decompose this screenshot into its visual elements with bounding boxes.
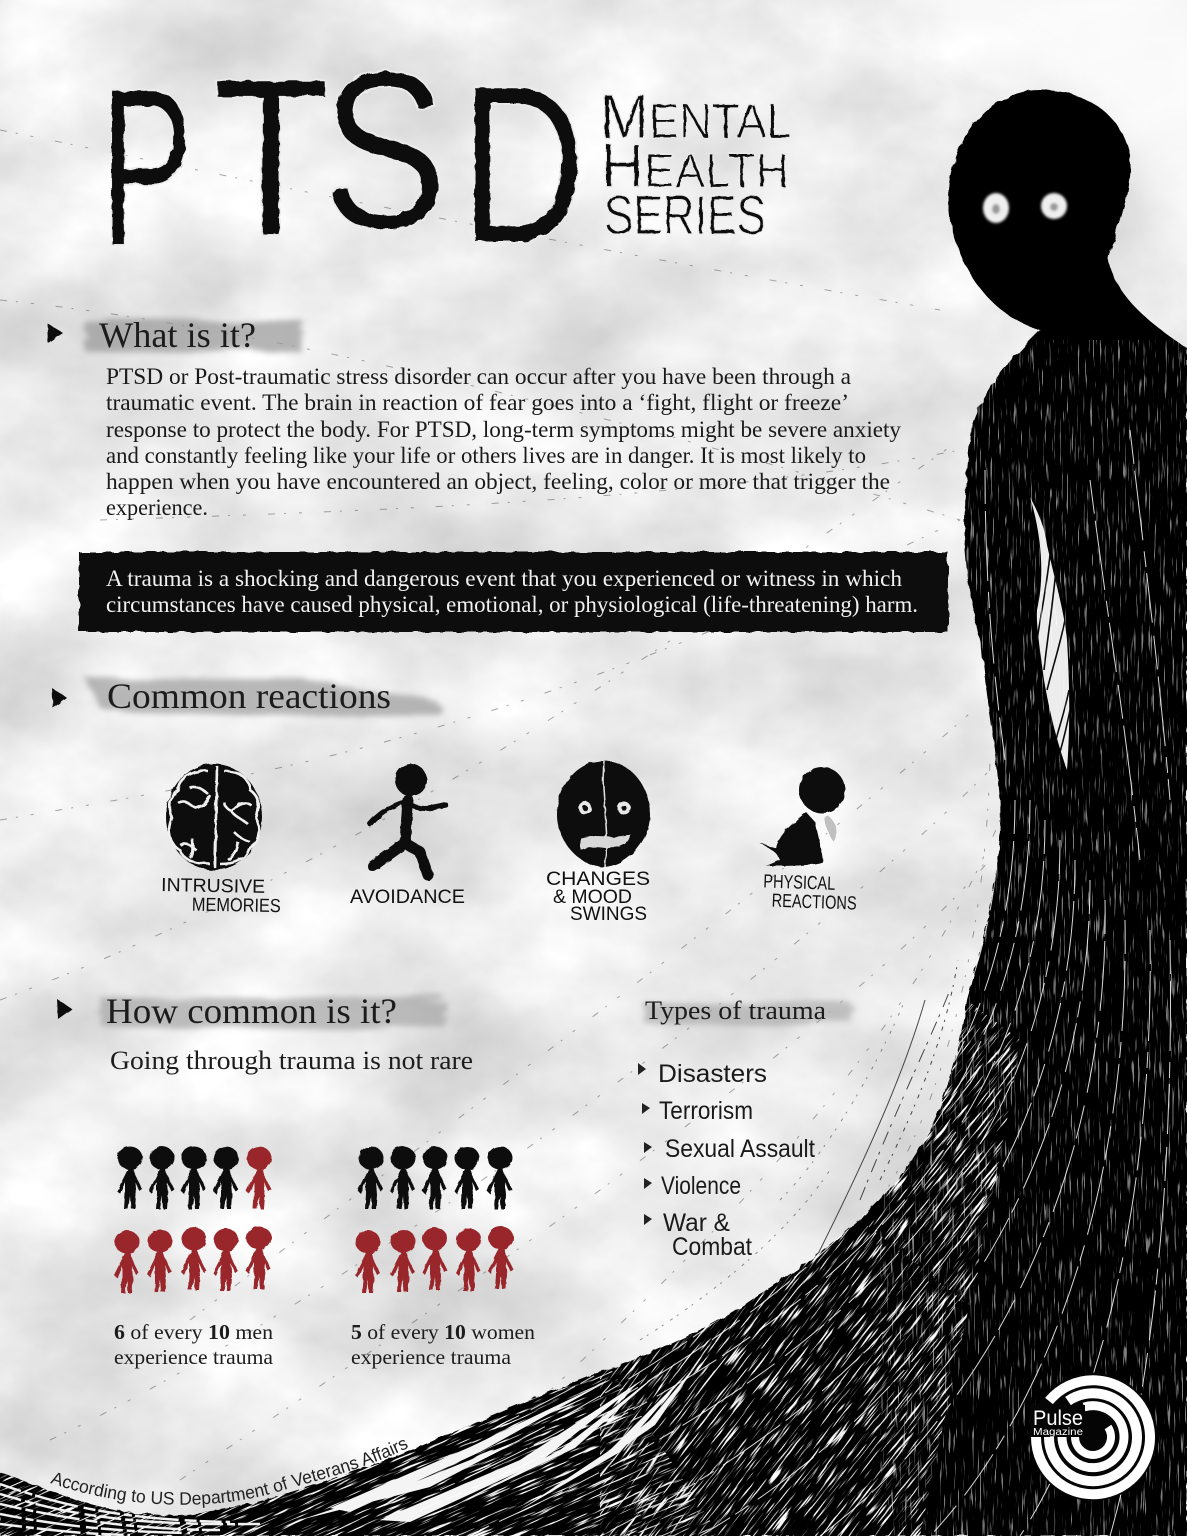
caption: women: experience trauma (351, 1345, 512, 1369)
icon: walking figure (370, 764, 446, 875)
caption: men: experience trauma (114, 1345, 274, 1369)
heading: What is it?: What is it? (99, 315, 256, 355)
subtitle: Mental Health Series: MENTAL (600, 82, 792, 152)
scratch lines (0, 130, 1000, 1480)
text block: definition (106, 364, 901, 521)
logo rings (1036, 1380, 1150, 1494)
label: avoidance: AVOIDANCE (350, 887, 465, 908)
heading: Common reactions: Common reactions (107, 676, 391, 716)
label: changes and mood swings: & MOOD (553, 887, 632, 908)
list: types of trauma: Sexual Assault (665, 1135, 815, 1163)
pictogram: women 5 of 10 (355, 1146, 514, 1293)
banner: trauma definition (79, 552, 948, 632)
label: changes and mood swings: SWINGS (570, 904, 647, 925)
bullet: How common (57, 999, 72, 1019)
caption: women: 5 of every 10 women (351, 1320, 536, 1344)
heading brush: Common reactions (85, 678, 440, 716)
caption: women (351, 1320, 536, 1369)
text block: definition: traumatic event. The brain in reaction of fear goes into a ‘fight, flight or freeze’ (106, 390, 849, 416)
icon: split face (557, 761, 650, 867)
subtitle: Mental Health Series: HEALTH (601, 132, 789, 201)
light corner wash (820, 0, 1187, 340)
label: intrusive memories: INTRUSIVE (161, 875, 265, 898)
title: PTSD (100, 24, 586, 293)
title: PTSD: D (460, 38, 586, 290)
title: PTSD: S (322, 24, 447, 276)
figure wisps (640, 960, 958, 1340)
label: intrusive memories: MEMORIES (192, 895, 281, 917)
heading: Types of trauma: Types of trauma (645, 996, 826, 1025)
caption: men (114, 1320, 274, 1369)
title: PTSD: T (212, 31, 330, 283)
eyes (983, 193, 1067, 223)
text block: definition: PTSD or Post-traumatic stress disorder can occur after you have been through a (106, 364, 852, 390)
label: physical reactions (762, 871, 858, 915)
subheading: trauma is not rare: Going through trauma is not rare (110, 1046, 473, 1075)
label: changes and mood swings: CHANGES (546, 869, 650, 890)
arm gap (1030, 497, 1070, 770)
subtitle: Mental Health Series (600, 82, 792, 246)
list: types of trauma: Disasters (658, 1060, 767, 1088)
label: physical reactions: PHYSICAL (763, 871, 836, 895)
flowing hairs (420, 430, 1170, 1536)
label: physical reactions: REACTIONS (771, 891, 857, 915)
pictogram: men 6 of 10 (114, 1146, 272, 1293)
icon: brain (166, 764, 262, 870)
banner: trauma definition: A trauma is a shocking and dangerous event that you experienced or witness in which (106, 566, 902, 592)
bullet: Common reactions (52, 688, 67, 708)
subtitle: Mental Health Series: SERIES (604, 183, 766, 246)
logo backing (1029, 1373, 1157, 1501)
text block: definition: response to protect the body. For PTSD, long-term symptoms might be severe anxiety (106, 417, 901, 443)
caption: men: 6 of every 10 men (114, 1320, 274, 1344)
title: PTSD: P (100, 41, 193, 293)
logo: Pulse Magazine (1029, 1373, 1157, 1501)
logo wordmark: Magazine (1033, 1427, 1084, 1438)
logo text backing (1030, 1405, 1085, 1436)
white strands lower left (300, 1360, 700, 1522)
bullet: What is it (47, 323, 63, 343)
heading brush: What is it (85, 320, 302, 352)
heading brush: How common (100, 998, 445, 1028)
list: types of trauma: Combat (672, 1233, 752, 1261)
heading: How common is it?: How common is it? (106, 991, 397, 1031)
fur streaks (0, 340, 1187, 1536)
source note: According to US Department of Veterans Affairs (50, 1440, 408, 1508)
logo wordmark: Pulse (1033, 1407, 1083, 1430)
banner: trauma definition: circumstances have caused physical, emotional, or physiological (life-threatening) harm. (106, 592, 918, 618)
text block: definition: happen when you have encountered an object, feeling, color or more that trigger the (106, 469, 890, 495)
list: types of trauma: War & (663, 1209, 730, 1237)
icon: crouching figure (759, 767, 845, 866)
list: types of trauma (638, 1060, 815, 1261)
list: types of trauma: Violence (661, 1172, 741, 1200)
text block: definition: and constantly feeling like your life or others lives are in danger. It is most likely to (106, 443, 866, 469)
label: intrusive memories (161, 875, 281, 917)
list: types of trauma: Terrorism (659, 1097, 753, 1125)
heading brush: Types of trauma (645, 1003, 853, 1025)
label: changes and mood swings (546, 869, 650, 925)
text block: definition: experience. (106, 495, 208, 521)
